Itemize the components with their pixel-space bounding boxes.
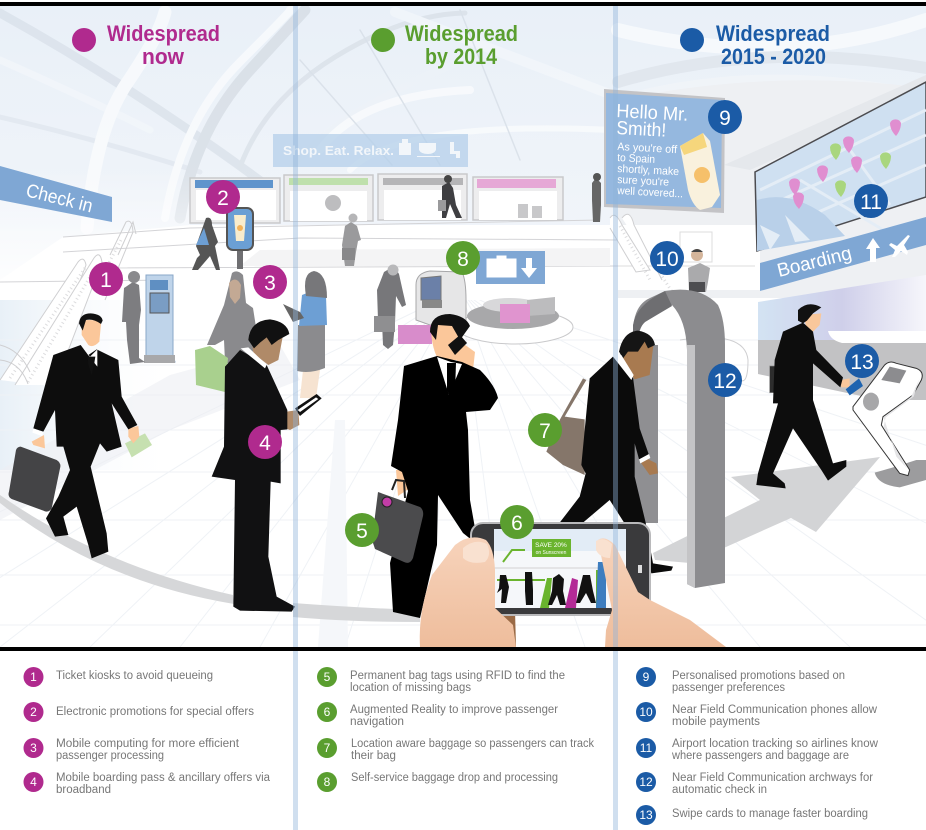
hair bbox=[248, 319, 289, 348]
item 4: Mobile boarding pass & ancillary offers via bbox=[56, 772, 271, 784]
sign 9: personalised promotion screen: to Spain bbox=[617, 152, 655, 166]
NFC archway bbox=[633, 290, 725, 588]
bag with RFID tag bbox=[372, 480, 423, 563]
hair bbox=[619, 331, 655, 358]
item 6: Augmented Reality to improve passenger bbox=[350, 704, 558, 716]
item 11: 11 bbox=[640, 741, 653, 755]
item 6: 6 bbox=[324, 705, 331, 719]
AR screen bbox=[494, 529, 626, 608]
badge 2: 2 bbox=[217, 187, 229, 210]
suit bbox=[390, 356, 498, 618]
item 13: 13 bbox=[639, 808, 653, 822]
bag bbox=[546, 378, 586, 475]
sign 9: personalised promotion screen: Smith! bbox=[616, 118, 667, 142]
badge 11 bbox=[854, 184, 888, 218]
badge 2 bbox=[206, 180, 240, 214]
badge 10: 10 bbox=[655, 248, 679, 271]
phone on ear bbox=[448, 335, 467, 355]
item 12: automatic check in bbox=[672, 784, 767, 796]
escalators left bbox=[0, 221, 136, 385]
suit bbox=[560, 357, 673, 573]
badge 11: 11 bbox=[860, 191, 882, 214]
callout save 20%: on Sunscreen bbox=[536, 550, 567, 556]
item 1: 1 bbox=[30, 670, 37, 684]
background: terminal ceiling bbox=[0, 5, 926, 310]
item 13 bbox=[636, 805, 868, 825]
grey woman with green bag bbox=[195, 271, 258, 392]
grey man on upper level bbox=[438, 175, 462, 218]
traveller on phone with bag tag bbox=[372, 314, 498, 618]
kiosk: ticket bbox=[144, 275, 175, 363]
phone button bbox=[638, 565, 642, 573]
escalator right bbox=[610, 214, 748, 381]
sign: check in: Check in bbox=[24, 180, 95, 217]
item 5 bbox=[317, 667, 565, 694]
badge 12: 12 bbox=[713, 370, 737, 393]
traveller with mobile boarding pass bbox=[212, 319, 322, 612]
item 4 bbox=[24, 772, 271, 796]
item 12 bbox=[636, 772, 873, 796]
badge 7 bbox=[528, 413, 562, 447]
icon: shopping bag bbox=[399, 139, 411, 155]
badge 1 bbox=[89, 262, 123, 296]
scene number badges bbox=[89, 100, 888, 547]
bottom rule bbox=[0, 647, 926, 651]
badge 3 bbox=[253, 265, 287, 299]
item 2: 2 bbox=[30, 705, 37, 719]
badge 13 bbox=[845, 344, 879, 378]
item 7: their bag bbox=[351, 750, 396, 762]
item 1: Ticket kiosks to avoid queueing bbox=[56, 670, 213, 682]
boarding kiosk bbox=[853, 362, 926, 487]
item 8 bbox=[317, 772, 558, 792]
item 10: Near Field Communication phones allow bbox=[672, 704, 878, 716]
hair bbox=[79, 313, 103, 331]
icon: sunscreen bottle bbox=[680, 133, 720, 210]
traveller walking with briefcase bbox=[9, 313, 152, 558]
grey man with NFC phone bbox=[688, 249, 710, 292]
badge 7: 7 bbox=[539, 420, 551, 443]
phone bbox=[295, 394, 322, 416]
woman with tablet bbox=[283, 271, 327, 398]
item 6 bbox=[317, 702, 558, 728]
heading: widespread now: Widespread bbox=[107, 21, 220, 46]
skin bbox=[82, 320, 101, 346]
suit bbox=[33, 345, 137, 558]
skin bbox=[621, 340, 654, 379]
legend column 1 bbox=[24, 667, 271, 796]
skin bbox=[803, 313, 821, 332]
icon: plane bbox=[889, 235, 910, 257]
fingers bbox=[420, 537, 516, 647]
window with aircraft bbox=[758, 275, 926, 400]
item 9: 9 bbox=[643, 670, 650, 684]
heading: widespread 2015 - 2020: Widespread bbox=[716, 21, 830, 46]
badge 8: 8 bbox=[457, 248, 469, 271]
item 13: Swipe cards to manage faster boarding bbox=[672, 808, 868, 820]
heading: widespread 2015 - 2020: 2015 - 2020 bbox=[721, 44, 826, 69]
boarding traveller bbox=[756, 304, 863, 488]
grey man by kiosk bbox=[122, 271, 145, 364]
heading: widespread by 2014: Widespread bbox=[405, 21, 518, 46]
item 7: 7 bbox=[324, 741, 331, 755]
item 8: Self-service baggage drop and processing bbox=[351, 772, 558, 784]
sign 9: personalised promotion screen: As you're off bbox=[617, 141, 678, 156]
item 9 bbox=[636, 667, 845, 694]
traveller with location-aware baggage bbox=[546, 331, 673, 573]
item 3 bbox=[24, 738, 240, 762]
skin bbox=[431, 321, 463, 364]
item 10 bbox=[636, 702, 878, 728]
icon: up arrow bbox=[866, 238, 880, 262]
callout save 20% bbox=[532, 539, 571, 557]
badge 6: 6 bbox=[511, 512, 523, 535]
shirt and tie bbox=[81, 345, 97, 367]
sign: shop eat relax: Shop. Eat. Relax. bbox=[283, 143, 394, 158]
shop 2 bbox=[284, 175, 373, 221]
sign: boarding bbox=[760, 217, 926, 291]
folder bbox=[770, 366, 779, 393]
shirt bbox=[613, 355, 634, 380]
map screen: airport location tracking bbox=[755, 82, 926, 251]
grey bag bbox=[527, 297, 555, 316]
badge 13: 13 bbox=[850, 351, 874, 374]
shop 4 bbox=[473, 177, 563, 220]
item 5: 5 bbox=[324, 670, 331, 684]
heading: widespread now bbox=[72, 21, 220, 69]
item 11: Airport location tracking so airlines know bbox=[672, 738, 879, 750]
wrist shadow bbox=[490, 610, 516, 647]
item 6: navigation bbox=[350, 716, 404, 728]
legend column 3 bbox=[636, 667, 879, 825]
heading: widespread by 2014: by 2014 bbox=[425, 44, 498, 69]
item 3: Mobile computing for more efficient bbox=[56, 738, 240, 750]
badge 8 bbox=[446, 241, 480, 275]
sign: check in bbox=[0, 166, 112, 222]
item 7 bbox=[317, 738, 594, 762]
badge 9 bbox=[708, 100, 742, 134]
callout save 20%: SAVE 20% bbox=[535, 542, 567, 549]
shirt and tie bbox=[437, 357, 462, 395]
sign 9: personalised promotion screen: well covered... bbox=[616, 185, 683, 200]
item 11: where passengers and baggage are bbox=[671, 750, 849, 762]
badge 10 bbox=[650, 241, 684, 275]
badge 4: 4 bbox=[259, 432, 271, 455]
column dividers bbox=[293, 5, 618, 830]
sign 9: personalised promotion screen: shortly, make bbox=[617, 163, 679, 178]
phone body bbox=[471, 523, 650, 615]
skin bbox=[252, 333, 283, 365]
item 2: Electronic promotions for special offers bbox=[56, 706, 254, 718]
floor arrow shadow bbox=[653, 457, 880, 563]
grey man on mezzanine bbox=[342, 214, 361, 266]
baggage drop machine bbox=[416, 271, 466, 325]
legend column 2 bbox=[317, 667, 594, 792]
distant figure near promo screen bbox=[592, 173, 601, 222]
heading: widespread by 2014 bbox=[371, 21, 518, 69]
suit bbox=[212, 350, 295, 612]
item 4: broadband bbox=[56, 784, 111, 796]
item 5: Permanent bag tags using RFID to find the bbox=[350, 670, 565, 682]
badge 1: 1 bbox=[100, 269, 112, 292]
icon: coffee cup bbox=[417, 143, 440, 157]
badge 6 bbox=[500, 505, 534, 539]
item 4: 4 bbox=[30, 775, 37, 789]
item 3: 3 bbox=[30, 741, 37, 755]
shop 1 bbox=[190, 178, 280, 223]
grey traveller with pink bag bbox=[374, 264, 432, 349]
badge 3: 3 bbox=[264, 272, 276, 295]
shop fronts bbox=[190, 174, 563, 223]
heading: widespread 2015 - 2020 bbox=[680, 21, 830, 69]
sign 9: personalised promotion screen: sure you're bbox=[617, 174, 669, 189]
item 9: Personalised promotions based on bbox=[672, 670, 845, 682]
boarding card bbox=[125, 433, 152, 457]
hair bbox=[798, 304, 821, 323]
swipe card bbox=[846, 378, 863, 395]
icon: seated person bbox=[450, 142, 460, 158]
heading: widespread now: now bbox=[142, 44, 185, 69]
sign: boarding: Boarding bbox=[775, 243, 854, 282]
item 12: 12 bbox=[639, 775, 653, 789]
badge 4 bbox=[248, 425, 282, 459]
item 12: Near Field Communication archways for bbox=[672, 772, 873, 784]
floor bbox=[0, 290, 926, 647]
sign 9: personalised promotion screen bbox=[604, 89, 725, 213]
briefcase bbox=[9, 447, 60, 512]
self-service baggage sign 8 bbox=[476, 251, 545, 284]
sign: shop eat relax bbox=[273, 134, 468, 167]
icon: suitcase bbox=[487, 256, 516, 277]
baggage carousel bbox=[457, 297, 573, 344]
badge 9: 9 bbox=[719, 107, 731, 130]
icon: down arrow bbox=[521, 258, 537, 278]
item 10: 10 bbox=[639, 705, 653, 719]
item 5: location of missing bags bbox=[350, 682, 471, 694]
display 2: electronic promotion bbox=[227, 208, 253, 269]
sign 9: personalised promotion screen: Hello Mr. bbox=[616, 101, 689, 126]
woman on mezzanine bbox=[192, 218, 220, 270]
item 10: mobile payments bbox=[672, 716, 760, 728]
shop 3 bbox=[378, 174, 467, 220]
item 2 bbox=[24, 702, 254, 722]
item 9: passenger preferences bbox=[672, 682, 785, 694]
suit bbox=[756, 323, 846, 488]
badge 5 bbox=[345, 513, 379, 547]
item 8: 8 bbox=[324, 775, 331, 789]
badge 5: 5 bbox=[356, 520, 368, 543]
top rule bbox=[0, 2, 926, 6]
hand holding phone with augmented reality view bbox=[420, 523, 726, 647]
floor curve bbox=[0, 495, 420, 622]
badge 12 bbox=[708, 363, 742, 397]
item 1 bbox=[24, 667, 213, 687]
hair bbox=[430, 314, 470, 340]
item 3: passenger processing bbox=[56, 750, 164, 762]
pink bag bbox=[500, 304, 530, 323]
icon: location pins bbox=[789, 119, 901, 209]
item 11 bbox=[636, 738, 879, 762]
item 7: Location aware baggage so passengers can track bbox=[351, 738, 594, 750]
mezzanine and lower hall walls bbox=[0, 220, 760, 300]
